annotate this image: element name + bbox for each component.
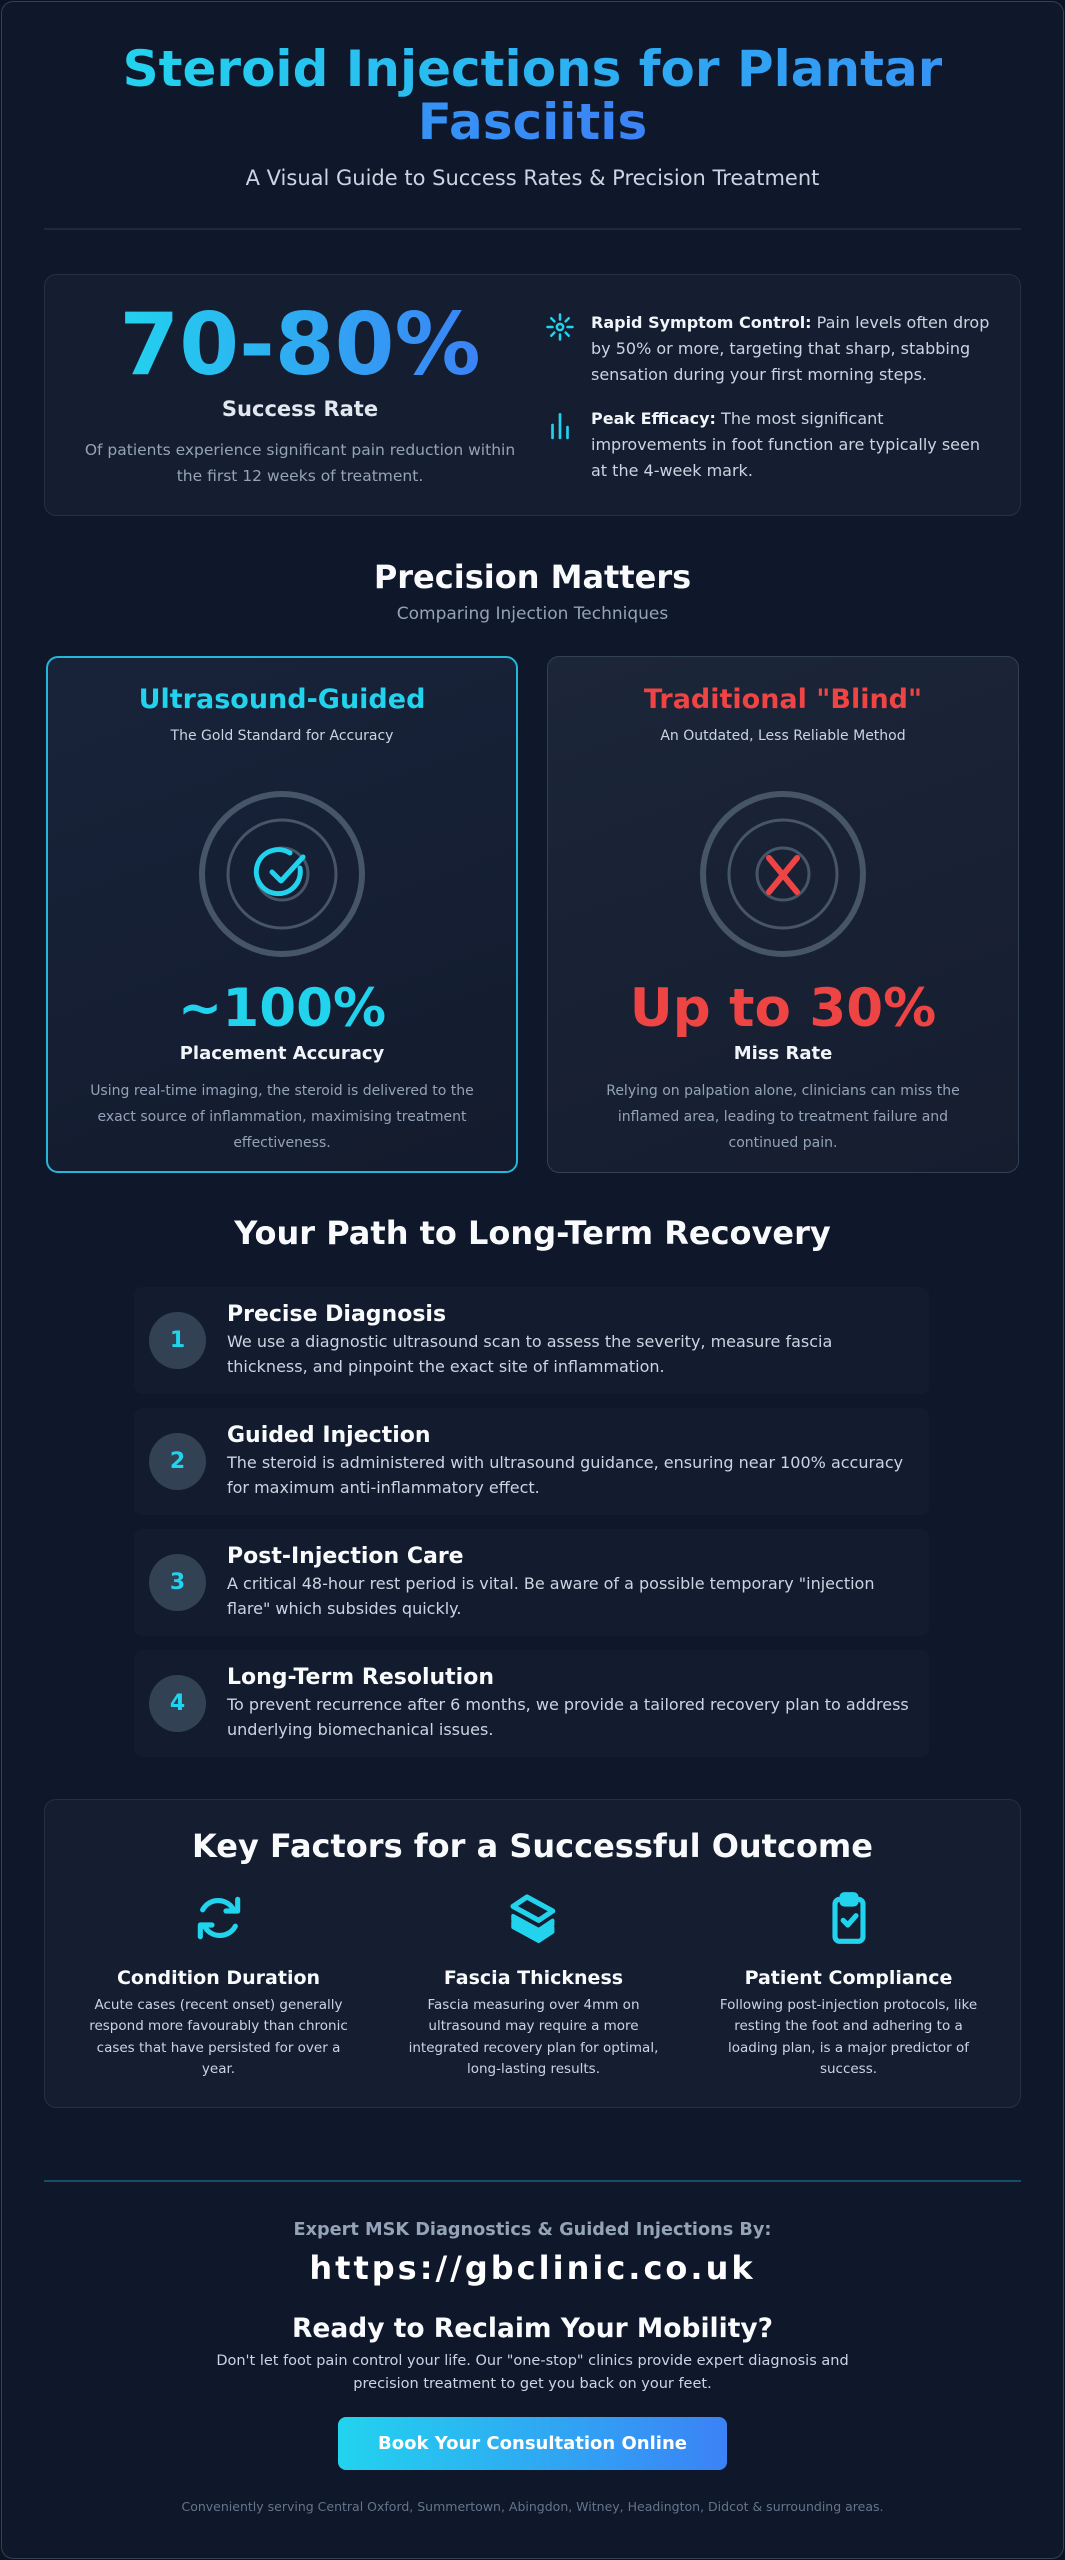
- button: book consultation: [338, 2417, 727, 2470]
- bullet: peak efficacy: Peak Efficacy: The most significant improvements in foot function are typically seen at the 4-week mark.: [591, 409, 980, 480]
- number badge: 2: [170, 1449, 185, 1474]
- footer: provider label: Expert MSK Diagnostics & Guided Injections By:: [294, 2220, 771, 2240]
- icon: clipboard check: [832, 1892, 866, 1944]
- button: book consultation: Book Your Consultation Online: [378, 2433, 687, 2454]
- number badge: 3: [170, 1570, 185, 1595]
- icon: sparkle: [546, 313, 574, 341]
- title: Steroid Injections for Plantar: [123, 40, 942, 98]
- step text: The steroid is administered with ultrasound guidance, ensuring near 100% accuracy for maximum anti-inflammatory effect.: [227, 1453, 903, 1497]
- step text: A critical 48-hour rest period is vital. Be aware of a possible temporary "injection flare" which subsides quickly.: [227, 1574, 874, 1618]
- description: Using real-time imaging, the steroid is delivered to the exact source of inflammation, maximising treatment effectiveness.: [90, 1083, 474, 1151]
- step text: To prevent recurrence after 6 months, we provide a tailored recovery plan to address underlying biomechanical issues.: [227, 1695, 909, 1739]
- step 3: [134, 1529, 929, 1636]
- factor: patient compliance: Following post-injection protocols, like resting the foot and adhering to a loading plan, is a major predictor of success.: [720, 1997, 977, 2077]
- icon: target with X: [700, 791, 866, 957]
- card subtitle: The Gold Standard for Accuracy: [171, 728, 393, 744]
- factor: patient compliance: Patient Compliance: [745, 1967, 952, 1989]
- step title: Guided Injection: [227, 1423, 431, 1448]
- footer note: Conveniently serving Central Oxford, Summertown, Abingdon, Witney, Headington, Didcot & surrounding areas.: [181, 2499, 884, 2514]
- icon: target with check: [199, 791, 365, 957]
- number badge: [149, 1554, 206, 1611]
- icon: layers: [510, 1894, 556, 1944]
- step title: Long-Term Resolution: [227, 1665, 494, 1690]
- number badge: 4: [170, 1691, 185, 1716]
- card title: Ultrasound-Guided: [139, 684, 425, 715]
- step 2: [134, 1408, 929, 1515]
- step title: Precise Diagnosis: [227, 1302, 446, 1327]
- subtitle: A Visual Guide to Success Rates & Precision Treatment: [246, 166, 819, 190]
- big stat 70-80%: 70-80%: [119, 295, 481, 395]
- panel: traditional blind: [547, 656, 1019, 1173]
- number badge: [149, 1433, 206, 1490]
- panel: key factors: [44, 1799, 1021, 2108]
- step 1: [134, 1287, 929, 1394]
- footer: url: https://gbclinic.co.uk: [309, 2249, 756, 2287]
- stat up to 30%: Up to 30%: [630, 978, 936, 1039]
- factor: condition duration: [89, 1896, 348, 2077]
- title: [123, 40, 942, 151]
- description: Relying on palpation alone, clinicians can miss the inflamed area, leading to treatment failure and continued pain.: [606, 1083, 960, 1151]
- factor: condition duration: Acute cases (recent onset) generally respond more favourably than chronic cases that have persisted for over a year.: [89, 1997, 348, 2077]
- stat label: Placement Accuracy: [180, 1043, 384, 1064]
- title: Fasciitis: [418, 93, 647, 151]
- factor: fascia thickness: [409, 1894, 658, 2077]
- step text: We use a diagnostic ultrasound scan to assess the severity, measure fascia thickness, and pinpoint the exact site of inflammation.: [227, 1332, 832, 1376]
- number badge: [149, 1675, 206, 1732]
- bullet: rapid symptom control: Rapid Symptom Control: Pain levels often drop by 50% or more, targeting that sharp, stabbing sensation during your first morning steps.: [591, 313, 989, 384]
- panel heading: Key Factors for a Successful Outcome: [192, 1827, 873, 1865]
- cta heading: Ready to Reclaim Your Mobility?: [292, 2313, 773, 2344]
- heading: path to recovery: Your Path to Long-Term Recovery: [234, 1214, 831, 1252]
- step 4: [134, 1650, 929, 1757]
- card subtitle: An Outdated, Less Reliable Method: [660, 728, 906, 744]
- subheading: Comparing Injection Techniques: [397, 604, 668, 624]
- stat label: Miss Rate: [734, 1043, 832, 1064]
- heading: precision matters: Precision Matters: [374, 558, 691, 596]
- icon: refresh: [198, 1896, 240, 1940]
- step title: Post-Injection Care: [227, 1544, 464, 1569]
- cta text: Don't let foot pain control your life. Our "one-stop" clinics provide expert diagnosis and precision treatment to get you back on your feet.: [216, 2353, 849, 2392]
- panel: ultrasound-guided: [46, 656, 518, 1173]
- number badge: 1: [170, 1328, 185, 1353]
- factor: fascia thickness: Fascia measuring over 4mm on ultrasound may require a more integrated recovery plan for optimal, long-lasting results.: [409, 1997, 658, 2077]
- card title: Traditional "Blind": [644, 684, 922, 715]
- success rate label: Success Rate: [222, 397, 378, 421]
- factor: condition duration: Condition Duration: [117, 1967, 320, 1989]
- number badge: [149, 1312, 206, 1369]
- panel: success rate: [44, 274, 1021, 516]
- icon: bar chart: [551, 413, 569, 440]
- stat ~100%: ~100%: [178, 978, 386, 1039]
- factor: fascia thickness: Fascia Thickness: [444, 1967, 623, 1989]
- success rate description: Of patients experience significant pain reduction within the first 12 weeks of treatment.: [85, 441, 515, 485]
- factor: patient compliance: [720, 1892, 977, 2077]
